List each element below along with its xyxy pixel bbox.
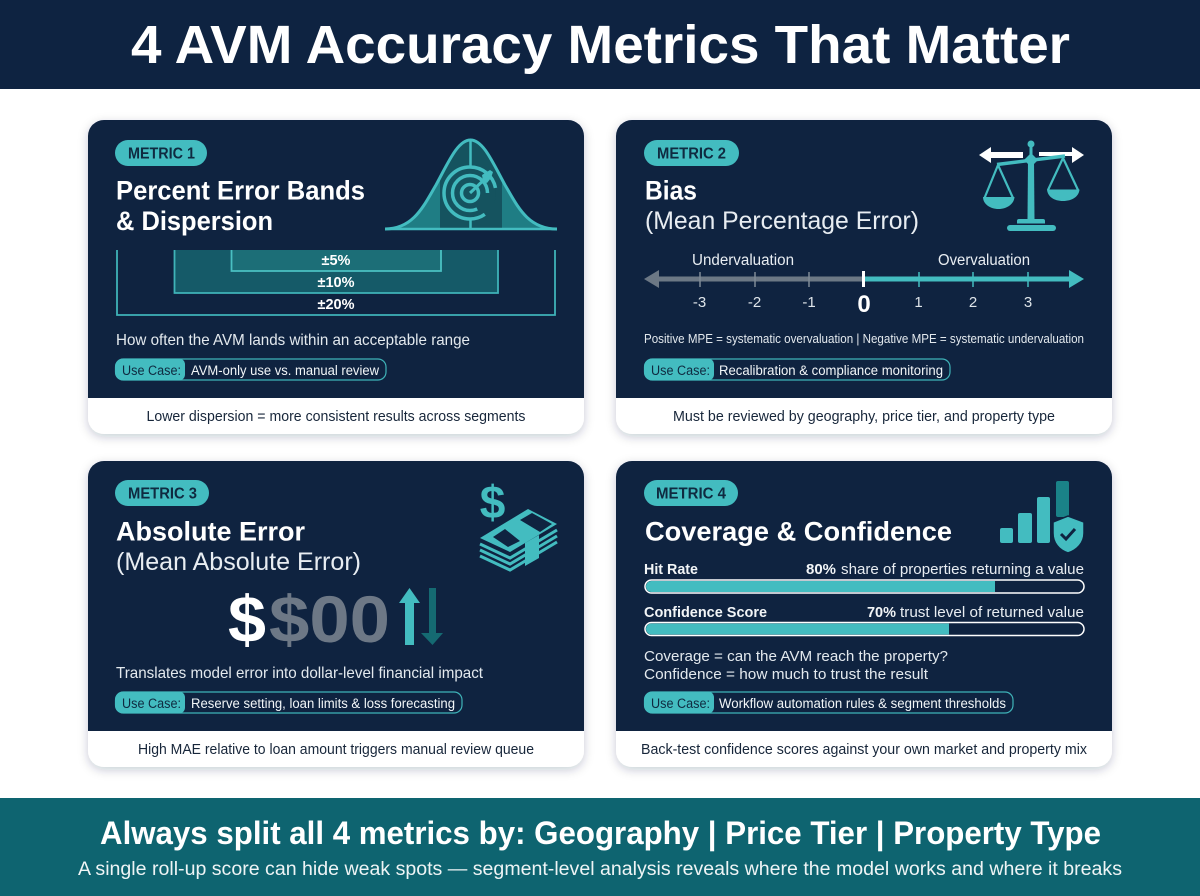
- heading: absolute error: Absolute Error: [116, 516, 305, 546]
- heading: bias: Bias: [645, 176, 697, 206]
- heading: coverage and confidence: Coverage & Confidence: [645, 516, 952, 546]
- chart: confidence score bar: Confidence Score: [644, 605, 767, 621]
- heading: absolute error: [116, 516, 361, 576]
- footer headline: Always split all 4 metrics by: Geography | Price Tier | Property Type: [100, 815, 1101, 851]
- chart: nested error bands: ±5%: [322, 253, 351, 269]
- chart: confidence score bar: 70%: [867, 605, 896, 621]
- heading: percent error bands: Percent Error Bands: [116, 176, 365, 206]
- badge: metric 2: METRIC 2: [657, 146, 726, 162]
- use case tag: [644, 358, 950, 380]
- footer banner: [0, 798, 1200, 896]
- chart: bias number line: 3: [1024, 294, 1032, 311]
- chart: nested error bands: [117, 250, 555, 315]
- footer subtext: A single roll-up score can hide weak spots — segment-level analysis reveals where the model works and where it breaks: [78, 859, 1122, 880]
- use case tag: Reserve setting, loan limits & loss forecasting: [191, 696, 455, 711]
- chart: nested error bands: ±10%: [318, 275, 355, 291]
- chart: confidence score bar: [644, 605, 1084, 636]
- takeaway: Must be reviewed by geography, price tier, and property type: [673, 409, 1055, 425]
- use case tag: Workflow automation rules & segment thresholds: [719, 696, 1006, 711]
- icon: dollar and cash stack: $: [480, 476, 505, 528]
- description: Confidence = how much to trust the result: [644, 666, 929, 683]
- use case tag: AVM-only use vs. manual review: [191, 363, 379, 378]
- heading: percent error bands: [116, 176, 365, 236]
- use case tag: Use Case:: [122, 363, 181, 378]
- use case tag: Use Case:: [122, 696, 181, 711]
- chart: nested error bands: ±20%: [318, 297, 355, 313]
- icon: balance scale with arrows: [979, 140, 1084, 231]
- use case tag: Recalibration & compliance monitoring: [719, 363, 943, 378]
- icon: dollar and cash stack: [480, 476, 557, 570]
- description: Positive MPE = systematic overvaluation | Negative MPE = systematic undervaluation: [644, 332, 1084, 346]
- axis labels: Overvaluation: [938, 252, 1030, 269]
- badge: metric 1: [115, 140, 207, 166]
- description: Coverage = can the AVM reach the property?: [644, 648, 948, 665]
- description: [644, 648, 948, 683]
- chart: bias number line: [644, 252, 1084, 318]
- panel: metric 4 coverage and confidence: [616, 461, 1112, 767]
- chart: bias number line: -1: [802, 294, 816, 311]
- chart: bias number line: 0: [857, 291, 871, 318]
- badge: metric 3: METRIC 3: [128, 486, 197, 502]
- badge: metric 4: METRIC 4: [656, 486, 726, 502]
- figure: dollar amount with arrows: $00: [269, 582, 390, 656]
- badge: metric 1: METRIC 1: [128, 146, 195, 162]
- use case tag: [644, 692, 1013, 714]
- use case tag: Use Case:: [651, 696, 710, 711]
- figure: dollar amount with arrows: [228, 582, 443, 656]
- description: Translates model error into dollar-level financial impact: [116, 665, 484, 682]
- use case tag: [115, 692, 462, 714]
- title: 4 AVM Accuracy Metrics That Matter: [131, 15, 1070, 75]
- badge: metric 3: [115, 480, 209, 506]
- takeaway: Lower dispersion = more consistent results across segments: [146, 409, 526, 425]
- use case tag: Use Case:: [651, 363, 710, 378]
- axis labels: Undervaluation: [692, 252, 794, 269]
- axis labels: [692, 252, 1030, 269]
- description: How often the AVM lands within an acceptable range: [116, 332, 470, 349]
- chart: bias number line: 1: [914, 294, 923, 311]
- icon: bell curve with target: [385, 140, 557, 230]
- chart: hit rate bar: Hit Rate: [644, 562, 698, 578]
- heading: bias: [645, 176, 919, 235]
- use case tag: [115, 358, 386, 380]
- chart: bias number line: -2: [748, 294, 761, 311]
- takeaway: High MAE relative to loan amount triggers manual review queue: [138, 742, 534, 758]
- figure: dollar amount with arrows: $: [228, 582, 266, 656]
- panel: metric 2 bias: [616, 120, 1112, 434]
- chart: confidence score bar: trust level of returned value: [900, 605, 1084, 621]
- chart: hit rate bar: [644, 562, 1084, 593]
- heading: bias: (Mean Percentage Error): [645, 207, 919, 235]
- chart: bias number line: 2: [969, 294, 977, 311]
- heading: absolute error: (Mean Absolute Error): [116, 548, 361, 576]
- heading: percent error bands: & Dispersion: [116, 206, 273, 236]
- panel: metric 3 absolute error: [88, 461, 584, 767]
- icon: bars with shield: [1000, 481, 1084, 553]
- header banner: [0, 0, 1200, 89]
- badge: metric 4: [644, 480, 738, 506]
- chart: bias number line: -3: [693, 294, 706, 311]
- panel: metric 1 percent error bands: [88, 120, 584, 434]
- badge: metric 2: [644, 140, 739, 166]
- takeaway: Back-test confidence scores against your own market and property mix: [641, 742, 1088, 758]
- chart: hit rate bar: 80%: [806, 562, 836, 578]
- chart: hit rate bar: share of properties returning a value: [841, 562, 1084, 578]
